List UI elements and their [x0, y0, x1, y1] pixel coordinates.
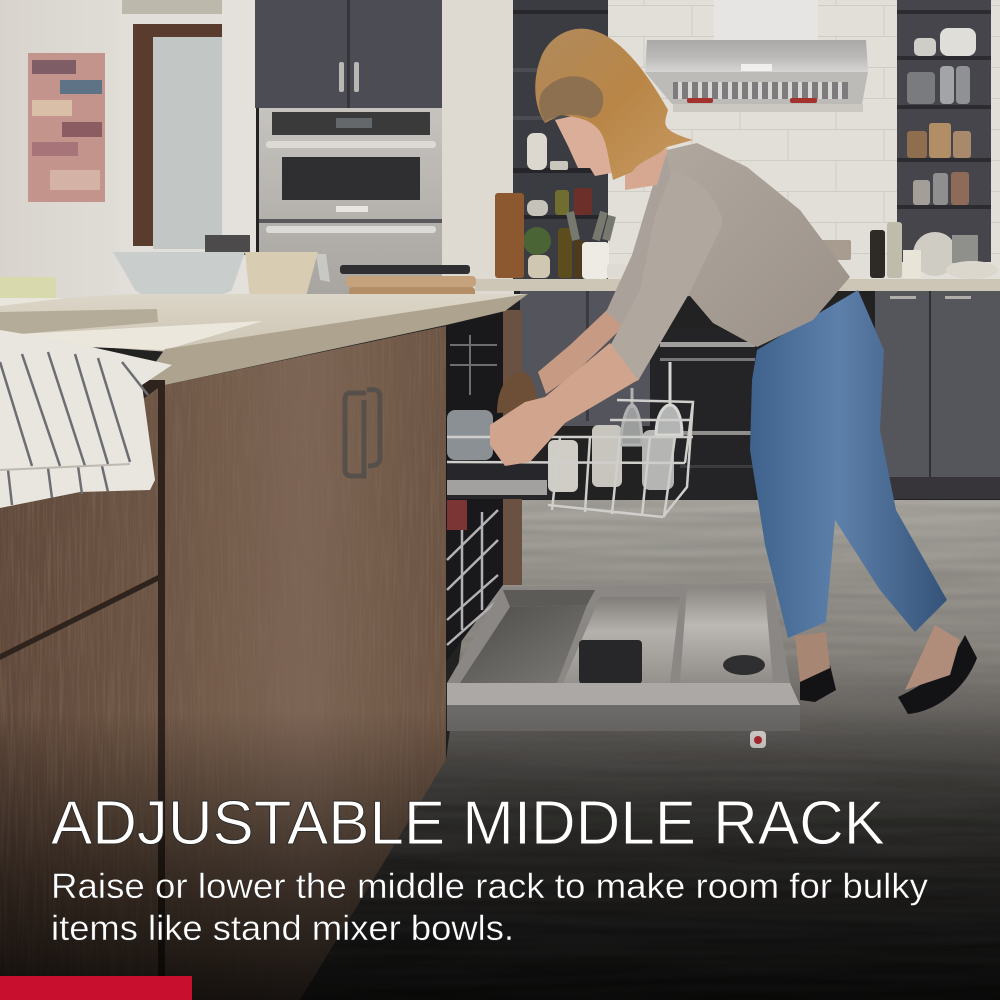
left wall [0, 0, 125, 320]
middle rack wire frame [447, 400, 693, 517]
far sleeve [606, 150, 680, 328]
open shelving centre [513, 0, 608, 282]
sweater body [650, 143, 850, 347]
sink [20, 321, 263, 350]
items on back counter [495, 193, 998, 279]
face [555, 105, 640, 176]
ankles [905, 625, 960, 690]
near sleeve [610, 172, 722, 381]
upper cabinets [255, 0, 442, 108]
jeans [750, 290, 947, 638]
items on island counter [0, 235, 476, 310]
island countertop [0, 294, 528, 385]
dishwasher tub interior [446, 310, 555, 662]
title: ADJUSTABLE MIDDLE RACK [51, 789, 885, 858]
cabinet handles [345, 390, 380, 476]
wall oven [259, 108, 443, 308]
open dishwasher door [447, 583, 800, 748]
dish towel [0, 330, 172, 508]
red accent bar [0, 976, 192, 1000]
wall artwork [28, 53, 105, 202]
description: items like stand mixer bowls. [51, 909, 514, 948]
open shelving right [897, 0, 991, 262]
hair [535, 29, 693, 180]
front counter edge [140, 294, 528, 385]
hair shadow [539, 76, 603, 122]
rear counter edge [0, 309, 158, 334]
white column left [222, 0, 256, 310]
description [51, 867, 929, 948]
window with door frame [120, 0, 225, 310]
far arm [538, 310, 625, 394]
neck [625, 148, 668, 190]
white tile wall [607, 0, 1000, 285]
range oven [650, 328, 755, 503]
bottom dark gradient [0, 710, 1000, 1000]
dishes on the middle rack [447, 362, 682, 492]
description: Raise or lower the middle rack to make room for bulky [51, 867, 929, 906]
white column centre [442, 0, 514, 300]
lower back cabinets [520, 291, 1000, 499]
woman [490, 29, 977, 714]
back countertop [475, 279, 1000, 291]
range hood [645, 0, 868, 112]
floor [300, 500, 1000, 1000]
near forearm and hand [490, 343, 638, 466]
shoes [898, 635, 977, 714]
island wood panels [0, 326, 446, 1000]
